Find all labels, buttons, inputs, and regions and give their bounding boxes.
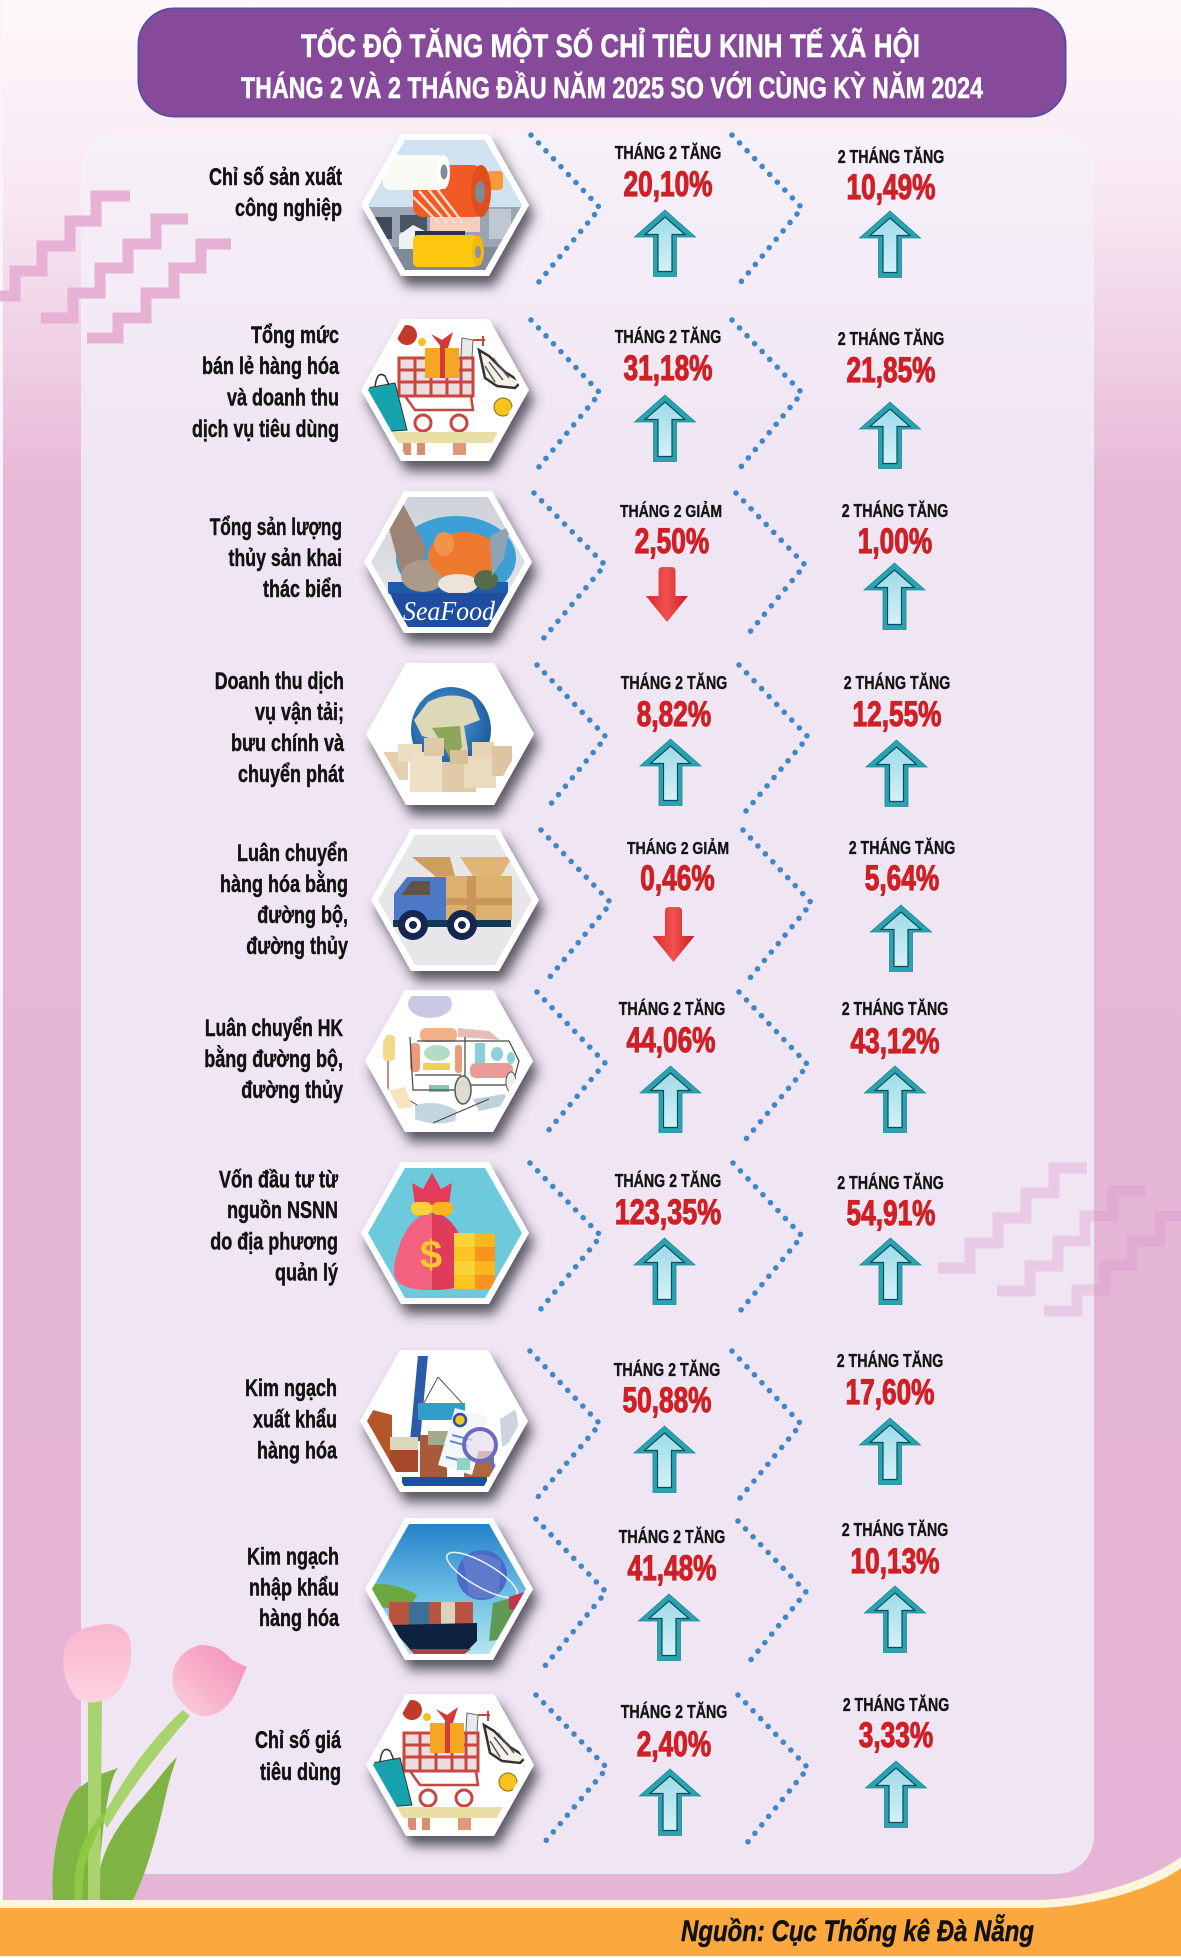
- arrow: up: [866, 740, 927, 806]
- arrow: up: [634, 395, 696, 462]
- dotted chevron 2: [743, 830, 812, 978]
- icon: factory rolls: [361, 134, 529, 277]
- value: month: 0,46%: [640, 858, 715, 898]
- value: month: 50,88%: [623, 1380, 711, 1420]
- label: month: THÁNG 2 GIẢM: [627, 837, 729, 858]
- row label: dịch vụ tiêu dùng: [192, 417, 339, 443]
- dotted chevron 2: [732, 1351, 801, 1498]
- dotted chevron 1: [530, 1351, 600, 1498]
- row label: Chỉ số giá: [255, 1728, 341, 1754]
- row label: Doanh thu dịch: [215, 669, 344, 695]
- arrow: up: [864, 1586, 926, 1652]
- arrow: up: [864, 1066, 926, 1132]
- label: month: THÁNG 2 TĂNG: [615, 142, 721, 163]
- label: month: THÁNG 2 TĂNG: [619, 998, 725, 1019]
- row label: Chỉ số sản xuất: [209, 165, 342, 191]
- row label: do địa phương: [210, 1229, 338, 1255]
- label: two months: 2 THÁNG TĂNG: [842, 500, 948, 521]
- row label: và doanh thu: [227, 385, 339, 411]
- dotted chevron 2: [738, 1695, 808, 1843]
- icon: bus: [365, 990, 533, 1132]
- row 8: exports: [245, 1350, 943, 1498]
- row 2: retail sales: [192, 319, 944, 468]
- label: month: THÁNG 2 TĂNG: [614, 1359, 720, 1380]
- value: month: 31,18%: [624, 348, 712, 388]
- label: month: THÁNG 2 GIẢM: [620, 500, 722, 521]
- row label: xuất khẩu: [253, 1407, 337, 1433]
- arrow: up: [640, 739, 701, 806]
- icon: shopping cart: [361, 319, 529, 461]
- label: month: THÁNG 2 TĂNG: [615, 1170, 721, 1191]
- arrow: down: [652, 907, 694, 962]
- value: two months: 10,49%: [847, 167, 935, 207]
- row label: [215, 669, 344, 788]
- dotted chevron 2: [733, 1163, 802, 1310]
- label: two months: 2 THÁNG TĂNG: [844, 672, 950, 693]
- label: month: THÁNG 2 TĂNG: [621, 672, 727, 693]
- dotted chevron 1: [537, 665, 606, 811]
- row label: Luân chuyển HK: [205, 1015, 343, 1042]
- row 9: imports: [247, 1518, 948, 1667]
- row label: hàng hóa: [259, 1606, 339, 1632]
- source note: Nguồn: Cục Thống kê Đà Nẵng: [681, 1914, 1034, 1948]
- value: two months: 21,85%: [847, 350, 935, 390]
- value: month: 123,35%: [615, 1193, 721, 1232]
- illustration: tulips: [53, 1624, 247, 1900]
- arrow: up: [860, 211, 920, 278]
- row label: hàng hóa bằng: [220, 869, 348, 898]
- row label: bán lẻ hàng hóa: [202, 354, 339, 380]
- label: two months: 2 THÁNG TĂNG: [843, 1694, 949, 1715]
- dotted chevron 1: [530, 1163, 601, 1310]
- label: two months: 2 THÁNG TĂNG: [837, 1172, 944, 1193]
- value: two months: 1,00%: [858, 521, 932, 561]
- row 5: freight transport: [220, 829, 955, 978]
- icon: delivery truck: [371, 829, 539, 971]
- label: two months: 2 THÁNG TĂNG: [838, 328, 944, 349]
- dotted chevron 2: [736, 493, 805, 639]
- label: month: THÁNG 2 TĂNG: [621, 1701, 727, 1722]
- row label: Luân chuyển: [237, 841, 348, 867]
- label: month: THÁNG 2 TĂNG: [619, 1526, 725, 1547]
- row label: [247, 1544, 339, 1632]
- value: two months: 54,91%: [847, 1193, 935, 1233]
- row label: đường bộ,: [257, 903, 348, 929]
- arrow: up: [638, 1594, 700, 1660]
- row label: Vốn đầu tư từ: [219, 1167, 339, 1193]
- row label: bằng đường bộ,: [204, 1044, 343, 1073]
- row 3: marine fisheries: [210, 491, 948, 639]
- arrow: up: [860, 1418, 920, 1484]
- row 6: passenger transport: [204, 990, 948, 1139]
- value: month: 8,82%: [637, 694, 711, 734]
- icon: export port: [360, 1350, 528, 1492]
- arrow: up: [864, 563, 925, 630]
- decoration: left staircase pattern: [0, 196, 231, 338]
- row label: tiêu dùng: [260, 1760, 341, 1786]
- icon: money bag: $: [420, 1233, 442, 1277]
- row label: vụ vận tải;: [255, 700, 344, 726]
- arrow: up: [860, 1238, 921, 1304]
- row label: [255, 1728, 341, 1786]
- row label: bưu chính và: [231, 731, 344, 757]
- arrow: up: [634, 1426, 695, 1492]
- icon: seafood: SeaFood: [403, 596, 495, 626]
- icon: globe and boxes: [366, 663, 534, 805]
- dotted chevron 2: [732, 135, 802, 283]
- arrow: up: [870, 905, 932, 972]
- label: two months: 2 THÁNG TĂNG: [838, 146, 944, 167]
- row label: [204, 1015, 343, 1104]
- footer band: [0, 1857, 1181, 1958]
- arrow: up: [634, 1238, 695, 1304]
- row 4: transport revenue: [215, 663, 950, 811]
- value: two months: 10,13%: [851, 1541, 939, 1581]
- row label: thủy sản khai: [229, 546, 342, 572]
- row label: công nghiệp: [235, 196, 342, 222]
- row label: hàng hóa: [257, 1438, 337, 1464]
- row label: Kim ngạch: [245, 1376, 337, 1402]
- dotted chevron 1: [536, 1519, 606, 1667]
- dotted chevron 2: [739, 992, 808, 1139]
- row 10: consumer price index: [255, 1694, 949, 1843]
- row label: nguồn NSNN: [227, 1198, 338, 1224]
- label: month: THÁNG 2 TĂNG: [615, 326, 721, 347]
- row label: [245, 1376, 337, 1464]
- title line 1: TỐC ĐỘ TĂNG MỘT SỐ CHỈ TIÊU KINH TẾ XÃ HỘI: [301, 28, 920, 64]
- row label: [209, 165, 342, 222]
- dotted chevron 1: [537, 992, 605, 1137]
- value: two months: 43,12%: [851, 1021, 939, 1061]
- dotted chevron 2: [738, 1521, 806, 1667]
- arrow: down: [646, 567, 688, 622]
- label: two months: 2 THÁNG TĂNG: [842, 998, 948, 1019]
- dotted chevron 2: [739, 665, 808, 811]
- value: month: 20,10%: [624, 164, 712, 204]
- row label: đường thủy: [241, 1078, 343, 1104]
- label: two months: 2 THÁNG TĂNG: [849, 837, 955, 858]
- row 7: public investment: [210, 1162, 944, 1310]
- decoration: right staircase pattern: [938, 1168, 1181, 1311]
- label: two months: 2 THÁNG TĂNG: [837, 1350, 943, 1371]
- row label: [210, 514, 342, 603]
- row label: thác biển: [263, 577, 342, 603]
- row label: [220, 841, 348, 960]
- dotted chevron 1: [536, 1695, 607, 1843]
- value: two months: 17,60%: [846, 1372, 934, 1412]
- row label: đường thủy: [246, 934, 348, 960]
- row label: [210, 1167, 339, 1286]
- dotted chevron 1: [534, 493, 605, 639]
- value: two months: 5,64%: [865, 858, 939, 898]
- row label: nhập khẩu: [249, 1575, 339, 1601]
- icon: money bag: [361, 1162, 529, 1304]
- dotted chevron 1: [541, 830, 611, 978]
- value: two months: 3,33%: [859, 1715, 933, 1755]
- value: month: 2,50%: [635, 521, 709, 561]
- row label: Kim ngạch: [247, 1544, 339, 1570]
- row label: Tổng sản lượng: [210, 514, 342, 541]
- title line 2: THÁNG 2 VÀ 2 THÁNG ĐẦU NĂM 2025 SO VỚI CÙNG KỲ NĂM 2024: [241, 71, 983, 105]
- row label: [192, 323, 339, 443]
- icon: shopping cart: [366, 1694, 534, 1836]
- panel: indicators: [81, 133, 1094, 1874]
- row 1: industrial production: [209, 134, 944, 283]
- title banner: [138, 8, 1066, 116]
- icon: seafood: [364, 491, 532, 633]
- dotted chevron 1: [531, 135, 600, 283]
- row label: chuyển phát: [238, 762, 344, 788]
- value: month: 41,48%: [628, 1548, 716, 1588]
- dotted chevron 1: [531, 320, 600, 468]
- arrow: up: [866, 1761, 926, 1828]
- arrow: up: [640, 1066, 701, 1132]
- arrow: up: [860, 402, 920, 468]
- row label: quản lý: [275, 1260, 338, 1286]
- label: two months: 2 THÁNG TĂNG: [842, 1519, 948, 1540]
- row label: Tổng mức: [251, 323, 339, 349]
- dotted chevron 2: [732, 320, 802, 468]
- icon: container ship: [365, 1518, 533, 1660]
- arrow: up: [640, 1769, 700, 1836]
- arrow: up: [634, 210, 696, 276]
- value: month: 44,06%: [627, 1020, 715, 1060]
- value: month: 2,40%: [637, 1724, 711, 1764]
- value: two months: 12,55%: [853, 694, 941, 734]
